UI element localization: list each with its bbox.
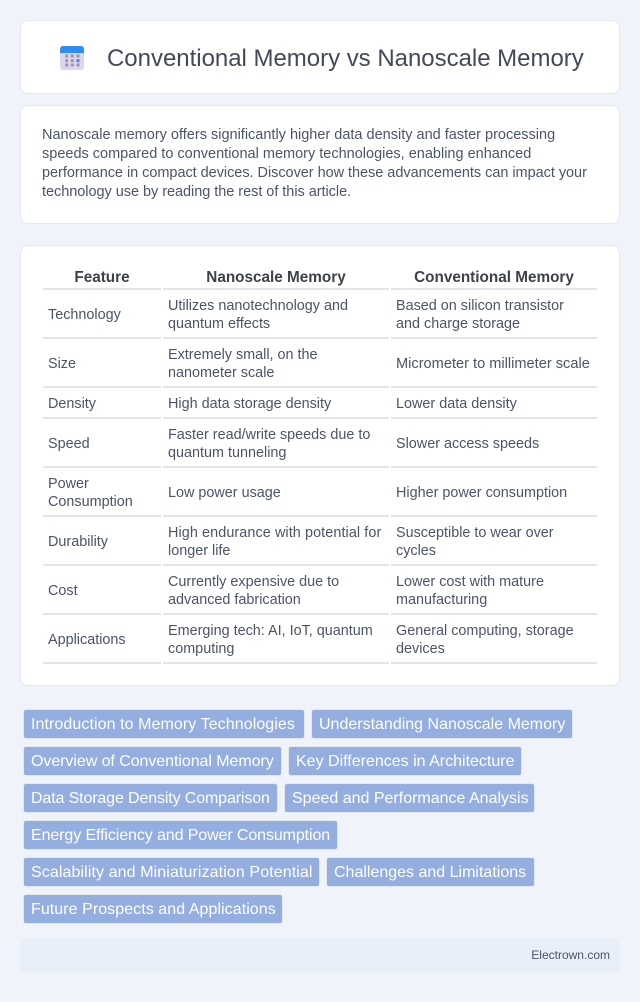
panel: intro text bbox=[20, 105, 620, 224]
row: Technology: quantum effects bbox=[168, 316, 270, 332]
row: Size: nanometer scale bbox=[168, 365, 274, 381]
tag bbox=[23, 709, 305, 739]
row: Applications: computing bbox=[168, 641, 234, 657]
tag bbox=[23, 820, 338, 850]
row: Power Consumption: Higher power consumption bbox=[396, 485, 567, 501]
tag: Speed and Performance Analysis bbox=[292, 790, 529, 807]
tag bbox=[23, 894, 283, 924]
row: Durability: cycles bbox=[396, 543, 436, 559]
row: Cost bbox=[43, 574, 597, 615]
row: Size: Micrometer to millimeter scale bbox=[396, 356, 590, 372]
row: Applications bbox=[43, 623, 597, 664]
tag: Future Prospects and Applications bbox=[31, 901, 276, 918]
row: Cost: Currently expensive due to bbox=[168, 574, 339, 590]
tag bbox=[311, 709, 573, 739]
tag: Energy Efficiency and Power Consumption bbox=[31, 827, 330, 844]
row: Size: Extremely small, on the bbox=[168, 347, 318, 363]
tag: Key Differences in Architecture bbox=[296, 753, 514, 770]
tag: Challenges and Limitations bbox=[334, 864, 526, 881]
row: Applications: Emerging tech: AI, IoT, quantum bbox=[168, 623, 373, 639]
row: Durability: longer life bbox=[168, 543, 230, 559]
table header: Feature bbox=[74, 269, 130, 286]
panel: topic tags bbox=[23, 709, 573, 924]
tag bbox=[23, 857, 320, 887]
row: Durability: Susceptible to wear over bbox=[396, 525, 554, 541]
table header: Nanoscale Memory bbox=[206, 269, 346, 286]
table header bbox=[43, 269, 597, 290]
row: Speed bbox=[43, 427, 597, 468]
row: Durability: High endurance with potential for bbox=[168, 525, 381, 541]
table header: Conventional Memory bbox=[414, 269, 574, 286]
row: Density: Lower data density bbox=[396, 396, 517, 412]
tag: Understanding Nanoscale Memory bbox=[319, 716, 565, 733]
row: Density: High data storage density bbox=[168, 396, 331, 412]
tag bbox=[288, 746, 522, 776]
row: Technology bbox=[43, 298, 597, 339]
footer bbox=[20, 938, 620, 972]
tag bbox=[284, 783, 535, 813]
title: Conventional Memory vs Nanoscale Memory bbox=[107, 45, 584, 72]
row: Applications: devices bbox=[396, 641, 445, 657]
row: Technology: Technology bbox=[48, 307, 121, 323]
footer credit: Electrown.com bbox=[531, 948, 610, 962]
text block: intro: speeds compared to conventional memory technologies, enabling enhanced bbox=[42, 146, 531, 162]
text block: intro: Nanoscale memory offers significantly higher data density and faster processing bbox=[42, 127, 555, 143]
row: Technology: and charge storage bbox=[396, 316, 520, 332]
row: Size: Size bbox=[48, 356, 76, 372]
row: Density: Density bbox=[48, 396, 96, 412]
row: Durability bbox=[43, 525, 597, 566]
row: Cost: Lower cost with mature bbox=[396, 574, 544, 590]
tag: Introduction to Memory Technologies bbox=[31, 716, 295, 733]
text block: intro: performance in compact devices. Discover how these advancements can impact your bbox=[42, 165, 587, 181]
row: Applications: General computing, storage bbox=[396, 623, 574, 639]
panel: comparison table bbox=[20, 245, 620, 686]
tag bbox=[23, 783, 278, 813]
row: Power Consumption: Power bbox=[48, 476, 89, 492]
tag: Scalability and Miniaturization Potential bbox=[31, 864, 313, 881]
icon: calendar grid bbox=[60, 46, 84, 70]
row: Speed: quantum tunneling bbox=[168, 445, 286, 461]
row: Power Consumption: Low power usage bbox=[168, 485, 281, 501]
row: Speed: Faster read/write speeds due to bbox=[168, 427, 370, 443]
row: Power Consumption: Consumption bbox=[48, 494, 133, 510]
text block: intro: technology use by reading the rest of this article. bbox=[42, 184, 351, 200]
row: Technology: Based on silicon transistor bbox=[396, 298, 564, 314]
row: Cost: manufacturing bbox=[396, 592, 487, 608]
row: Technology: Utilizes nanotechnology and bbox=[168, 298, 348, 314]
row: Speed: Slower access speeds bbox=[396, 436, 539, 452]
tag: Overview of Conventional Memory bbox=[31, 753, 274, 770]
row: Applications: Applications bbox=[48, 632, 126, 648]
panel: header bbox=[20, 20, 620, 94]
row: Cost: Cost bbox=[48, 583, 78, 599]
tag bbox=[326, 857, 535, 887]
row: Density bbox=[43, 396, 597, 419]
row: Power Consumption bbox=[43, 476, 597, 517]
row: Speed: Speed bbox=[48, 436, 90, 452]
text block: intro bbox=[42, 127, 587, 200]
tag bbox=[23, 746, 282, 776]
tag: Data Storage Density Comparison bbox=[31, 790, 270, 807]
row: Durability: Durability bbox=[48, 534, 108, 550]
row: Cost: advanced fabrication bbox=[168, 592, 301, 608]
row: Size bbox=[43, 347, 597, 388]
